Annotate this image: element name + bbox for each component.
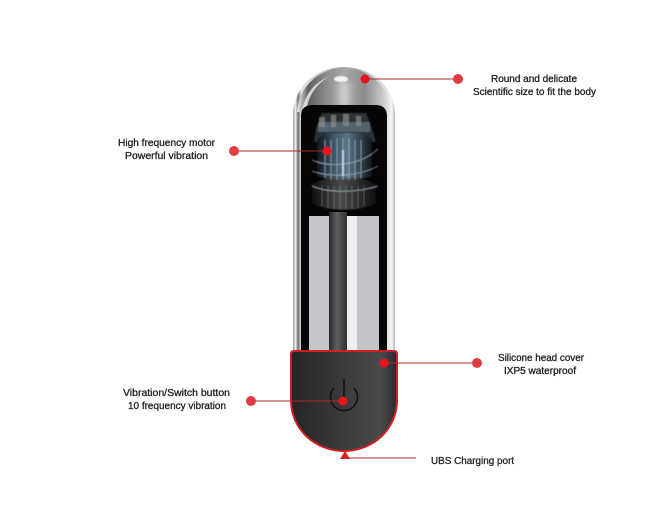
power icon (331, 379, 358, 411)
callout: high frequency motor: Powerful vibration (125, 151, 208, 162)
callout: vibration switch button: Vibration/Switch button (123, 388, 230, 399)
callout: round and delicate (360, 74, 596, 98)
silicone head cover (291, 351, 397, 451)
callout: silicone head cover (380, 353, 585, 377)
callout: high frequency motor: High frequency motor (118, 138, 216, 149)
callout: vibration switch button (123, 388, 348, 412)
metal shell (293, 67, 395, 355)
callout: round and delicate: Round and delicate (491, 74, 577, 85)
motor (312, 113, 378, 210)
callout: silicone head cover: IXP5 waterproof (504, 366, 576, 377)
product: bullet device (291, 67, 397, 459)
inner silver panels (309, 216, 379, 352)
inner window (301, 105, 387, 360)
callout: vibration switch button: 10 frequency vibration (128, 401, 226, 412)
shaft (329, 212, 347, 352)
callout: round and delicate: Scientific size to fit the body (473, 87, 596, 98)
charging port marker (340, 451, 350, 459)
callout: silicone head cover: Silicone head cover (498, 353, 585, 364)
callout: charging port: UBS Charging port (431, 456, 514, 467)
callout: high frequency motor (118, 138, 332, 162)
dome highlight (297, 68, 391, 112)
